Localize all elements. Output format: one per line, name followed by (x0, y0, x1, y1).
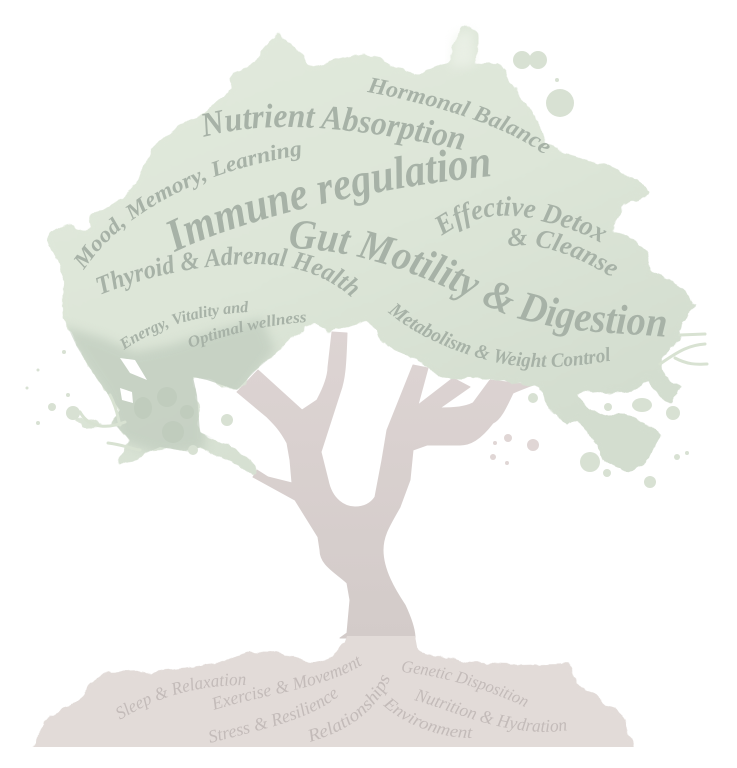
canopy darker wash, lower left (60, 318, 275, 455)
Environment: Environment (383, 698, 472, 738)
pale spike wash (450, 30, 475, 68)
Immune regulation: Immune regulation (166, 150, 490, 252)
root words: foundations (116, 656, 567, 742)
Hormonal Balance: Hormonal Balance (366, 78, 550, 153)
canopy words: health benefits (74, 78, 666, 371)
Mood, Memory, Learning: Mood, Memory, Learning (74, 144, 300, 270)
and Cleanse: & Cleanse (508, 228, 617, 276)
Nutrition and Hydration: Nutrition & Hydration (414, 689, 567, 732)
Exercise and Movement: Exercise & Movement (212, 656, 362, 710)
white gaps in lower limb (120, 358, 147, 403)
trunk base band (340, 636, 418, 656)
Optimal wellness: Optimal wellness (188, 314, 306, 348)
dark splashes, lower left (134, 387, 194, 443)
Sleep and Relaxation: Sleep & Relaxation (116, 674, 246, 720)
Relationships: Relationships (308, 674, 390, 742)
Gut Motility and Digestion: Gut Motility & Digestion (290, 221, 666, 337)
Genetic Disposition: Genetic Disposition (402, 662, 528, 707)
Effective Detox: Effective Detox (434, 196, 606, 242)
tree canopy (26, 22, 707, 488)
green splatter (26, 51, 689, 488)
Thyroid and Adrenal Health: Thyroid & Adrenal Health (96, 246, 358, 297)
tree trunk and branches (237, 332, 533, 638)
Nutrient Absorption: Nutrient Absorption (202, 104, 464, 150)
Energy, Vitality and: Energy, Vitality and (120, 300, 248, 350)
Stress and Resilience: Stress & Resilience (210, 690, 338, 742)
pink splatter (490, 434, 539, 465)
Metabolism and Weight Control: Metabolism & Weight Control (388, 303, 610, 371)
twigs (80, 334, 707, 450)
ground mound with trunk base (32, 642, 634, 747)
